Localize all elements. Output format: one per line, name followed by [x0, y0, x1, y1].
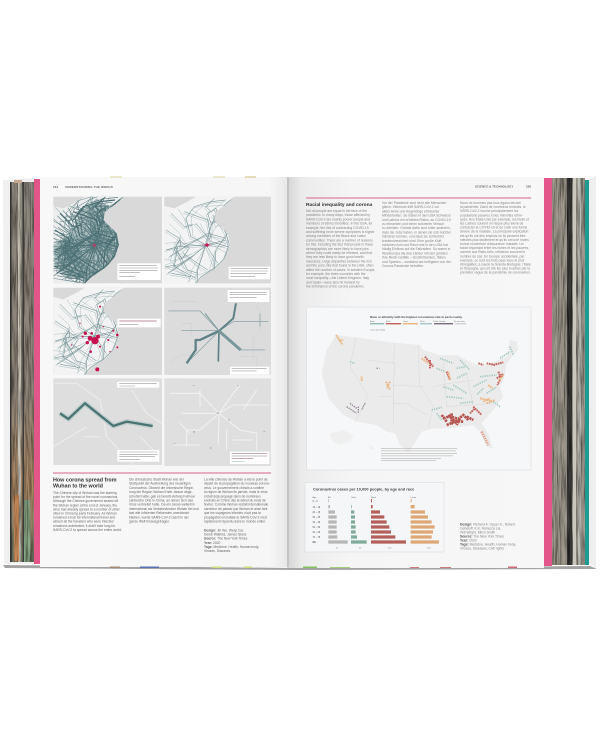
axis values: 160 — [427, 548, 431, 550]
right English text: insurance. Huge disparities between the rich — [306, 259, 372, 263]
county clusters asian and white — [350, 347, 513, 420]
faint lines — [170, 297, 260, 370]
map legend: Asian — [370, 320, 375, 323]
right English text: among members of the Black and Latino — [306, 234, 366, 238]
right French text: populations pauvres et les minorités ethni- — [460, 213, 523, 217]
right German text — [382, 201, 452, 268]
map legend: Cases per 10,000 — [370, 328, 385, 332]
right header: SCIENCE & TECHNOLOGY — [475, 184, 513, 188]
left heading: Wuhan to the world — [53, 484, 103, 490]
left credits — [204, 528, 259, 553]
left French text: s'était déjà propagé dans de nombreux — [204, 494, 261, 498]
left heading — [53, 477, 117, 490]
map title: Race or ethnicity with the highest coronavirus rate in each county — [370, 315, 462, 319]
left header: UNDERSTANDING THE WORLD — [65, 185, 114, 189]
right credits: Year: 2020 — [460, 538, 477, 542]
age labels: 70 – 79 — [312, 537, 321, 539]
right French text: nombre de cas. En Europe occidentale, par — [460, 254, 525, 258]
right French text — [460, 201, 531, 275]
left English text: point for the spread of the novel coronavirus. — [53, 495, 118, 499]
right English text: where they could easily be infected, and that — [306, 251, 372, 255]
right cover edge — [589, 175, 596, 569]
axis values: 51 — [336, 548, 339, 550]
map 3: infection dots — [53, 288, 162, 375]
map legend — [370, 320, 466, 332]
left German text: zahlreiche Orte in China, an denen sich das — [129, 498, 193, 502]
right French text: contracter la COVID-19 et de subir une forme — [460, 226, 527, 230]
right French text: d'inégalités, à savoir la Grande-Bretagne, l'Italie — [460, 262, 531, 266]
right German text: infizieren können, und dass sie schlechter — [382, 235, 445, 239]
left French text: la région de Wuhan fin janvier, mais le virus — [204, 490, 268, 494]
right English text: example, the risk of contracting COVID-19 — [306, 226, 369, 230]
right German text: allem Arme und Angehörige ethnischer — [382, 209, 440, 213]
right English text: demographics are more likely to have jobs — [306, 247, 369, 251]
county clusters black — [442, 413, 473, 425]
left French text: février. Comme Wuhan restait internationale — [204, 503, 268, 507]
age labels: 30 – 39 — [312, 517, 321, 519]
left credits: Tags: Medicine, Health, Human body, — [204, 545, 259, 549]
Wuhan marker — [93, 244, 96, 247]
age labels: 50 – 59 — [312, 527, 321, 529]
callouts — [117, 382, 159, 462]
teal edge — [585, 180, 589, 565]
US map panel — [306, 307, 531, 470]
age labels: 10 – 19 — [312, 507, 321, 509]
right German text: gleich. Vielerorts trifft SARS-CoV-2 vor — [382, 205, 440, 209]
right French text: première vague de la pandémie de coronavirus. — [460, 271, 531, 275]
age labels: 60 – 69 — [312, 532, 321, 534]
left German text: rung die Region Wuhan Ende Januar abge- — [129, 490, 193, 494]
map legend: Latino — [403, 320, 408, 323]
right German text: Westeuropa die drei Länder mit den größten — [382, 251, 448, 255]
right header — [475, 184, 531, 188]
Wuhan marker — [205, 243, 209, 247]
left English text — [53, 491, 122, 532]
right German text: zu erleiden. Gründe dafür sind unter anderem, — [382, 226, 451, 230]
infection clusters — [71, 306, 119, 371]
age labels: 20 – 29 — [312, 512, 321, 514]
left German text: Virus verbreitet hatte. Da ein Janan weiterhin — [129, 503, 195, 507]
column headers — [312, 496, 417, 499]
bar chart panel — [305, 482, 444, 552]
county clusters pacific and native — [347, 368, 379, 413]
bars: other — [351, 505, 367, 544]
map legend: Pacific Islander — [433, 320, 446, 323]
right French text: la pandémie. Dans de nombreux endroits, le — [460, 205, 526, 209]
US land — [322, 335, 518, 453]
right German text: Ihre Reich-Gefälle – Großbritannien, Italien — [382, 256, 446, 260]
column headers: All — [328, 496, 331, 499]
right German text: und Spanien – zunächst am heftigsten von der — [382, 260, 452, 264]
right German text: krankenversichert sind. Eine große Kluft — [382, 239, 441, 243]
left English text: Although the Chinese government sealed off — [53, 499, 118, 503]
right German text: Corona-Pandemie betroffen. — [382, 264, 424, 268]
axis values: 130 — [388, 548, 392, 550]
right English text: SARS-CoV-2 are mainly poorer people and — [306, 217, 370, 221]
right pink edge — [544, 178, 552, 566]
right French text: comme aux États-Unis, influence souvent le — [460, 249, 525, 254]
right German text: häufig Einfluss auf die Fallzahlen. So waren in — [382, 247, 451, 251]
column headers: Age — [312, 496, 317, 499]
left German text: Die chinesische Stadt Wuhan war der — [129, 478, 185, 482]
right French text: bonne couverture d'assurance maladie. Un — [460, 242, 524, 246]
map 4: schematic flow — [164, 288, 271, 375]
right French text: infectés plus facilement et qu'ils ont une moins — [460, 238, 529, 242]
right English text — [306, 209, 375, 289]
left French text: rapidement répandu dans le monde entier. — [204, 520, 266, 524]
bars: black — [371, 499, 406, 544]
right credits: Viruses, Diseases, Civil rights — [460, 546, 504, 550]
left page stack — [10, 180, 34, 562]
location markers — [173, 385, 265, 449]
map 6: light network — [164, 378, 271, 466]
Alaska and Hawaii — [330, 430, 375, 450]
callout — [229, 267, 270, 279]
left German text: blieben, wurde SARS-CoV-2 rasch in der — [129, 515, 190, 519]
map footnote — [381, 448, 457, 461]
right German text: Minderheiten. So haben in den USA Schwarze — [382, 214, 451, 218]
thin routes — [168, 311, 269, 363]
left English text: cities in China by early February. As Wuhan — [53, 512, 117, 516]
column headers: Black — [371, 497, 377, 499]
left English text: The Chinese city of Wuhan was the starting — [53, 491, 117, 495]
map legend: White — [420, 320, 425, 323]
left page block — [3, 177, 287, 567]
right English text: for example, the three countries with the — [306, 272, 366, 276]
age labels — [312, 501, 321, 544]
map 2: sparse network — [164, 196, 271, 284]
column headers: Latino — [410, 496, 417, 499]
right English text: pandemic. In many ways, those affected by — [306, 213, 370, 217]
right edge block — [544, 175, 596, 569]
chart title: Coronavirus cases per 10,000 people, by age and race — [313, 486, 415, 492]
left credits: Viruses, Diseases — [204, 549, 231, 553]
right French text: sévère de la maladie. La principale explication — [460, 230, 529, 234]
right English text: members of ethnic minorities. In the USA, for — [306, 222, 373, 226]
left credits: Source: The New York Times — [204, 537, 248, 541]
map legend: Black — [386, 321, 391, 323]
left credits: Derek Watkins, James Glanz — [204, 533, 247, 537]
left cover edge — [3, 178, 34, 564]
left German text: Startpunkt der Ausbreitung des neuartigen — [129, 482, 191, 486]
column headers: Other — [351, 496, 357, 499]
right credits: Source: The New York Times — [460, 534, 504, 538]
right header: 155 — [526, 184, 531, 188]
right English text: the imminence of the corona pandemic. — [306, 285, 365, 289]
left English text: SARS-CoV-2 to spread across the entire world. — [53, 528, 122, 532]
callouts — [228, 290, 269, 375]
right English text: affect the number of cases. In western Europe, — [306, 268, 375, 272]
right German text: Vor der Pandemie sind nicht alle Menschen — [382, 201, 446, 205]
right German text: zwischen Arm und Reich wie in den USA hat — [382, 243, 448, 247]
left French text: départ de la propagation du nouveau corona- — [204, 482, 270, 486]
left English text: remained a hub for international travel and — [53, 516, 115, 520]
right page stack — [552, 178, 585, 565]
left English text: almost all the travelers who were infected — [53, 520, 114, 524]
right French text: ques. Aux États-Unis par exemple, les Noirs et — [460, 216, 529, 221]
right English text: and suffering more severe symptoms is higher — [306, 230, 375, 234]
left German text — [129, 478, 199, 524]
right French text: SARS-CoV-2 touche principalement les — [460, 209, 519, 213]
left English text: the Wuhan region at the end of January, the — [53, 503, 117, 507]
right credits: Design: Richard A. Oppel Jr., Robert — [460, 522, 515, 526]
right English text: most inequality—the United Kingdom, Italy — [306, 276, 369, 280]
right English text: for this, including the fact that people in these — [306, 243, 373, 247]
county clusters latino — [336, 335, 503, 403]
right credits — [460, 522, 516, 550]
bars: latino — [411, 499, 439, 544]
callout — [117, 263, 161, 280]
right English text: communities. There are a number of reasons — [306, 238, 373, 242]
left page paper — [40, 177, 287, 567]
right credits: Gebeloff, K.K. Rebecca Lai, — [460, 526, 501, 530]
right English text: they are less likely to have good health — [306, 255, 364, 259]
right German text: zu erkranken und einen schweren Verlauf — [382, 222, 444, 226]
left German text: Coronavirus. Obwohl die chinesische Regie- — [129, 486, 194, 490]
right French text: et l'Espagne, qui ont été les plus touchés par la — [460, 267, 530, 271]
axis values — [336, 548, 431, 550]
bars: all — [328, 499, 348, 544]
page edge colour marks — [110, 176, 517, 568]
right French text: est qu'ils ont des emplois où ils peuvent être — [460, 234, 526, 238]
left French text — [204, 478, 270, 524]
axis values: 66 — [359, 548, 362, 550]
left German text: ganze Welt hinausgetragen. — [129, 520, 170, 524]
left French text: La ville chinoise de Wuhan a été le point de — [204, 478, 268, 482]
right French text: fossé important entre les riches et les pauvres, — [460, 246, 529, 250]
right English text: Not all people are equal in the face of the — [306, 209, 367, 213]
right English text: and Spain—were also hit hardest by — [306, 280, 360, 284]
gutter fold — [287, 177, 289, 567]
map 5: snake route — [53, 378, 162, 465]
left English text: virus had already spread to a number of other — [53, 507, 121, 511]
right German text: dass sie Jobs haben, in denen sie sich leichter — [382, 230, 452, 234]
map legend: No race data — [454, 320, 466, 323]
left German text: schottet hatte, gab es bereits Anfang Februar — [129, 494, 196, 498]
left heading: How corona spread from — [53, 477, 117, 483]
right French text: exemple, ce sont les trois pays avec le plus — [460, 258, 525, 262]
state borders — [350, 337, 493, 428]
left pink rule — [53, 472, 271, 474]
right credits: Tags: Medicine, Health, Human body, — [460, 542, 516, 546]
right pink rule — [306, 198, 531, 199]
age labels: 0 – 9 — [312, 501, 318, 503]
right credits: Will Wright, Mitch Smith — [460, 530, 495, 534]
left credits: Design: Jin Wu, Weiyi Cai, — [204, 528, 244, 532]
map grid top — [53, 196, 271, 375]
map grid bottom — [53, 378, 271, 466]
right French text: Nous ne sommes pas tous égaux devant — [460, 201, 521, 205]
left header: 154 — [53, 185, 58, 189]
right heading: Racial inequality and corona — [306, 202, 373, 208]
left French text: endroits en Chine dès le début du mois de — [204, 498, 266, 502]
left English text: remained undetected, it didn't take long for — [53, 524, 116, 528]
left French text: propagation mondiale le SARS-CoV-2 s'est — [204, 515, 267, 519]
map 1: dense network — [53, 196, 162, 284]
left credits: Year: 2020 — [204, 541, 220, 545]
age labels: 80+ — [312, 542, 317, 544]
right English text: and the poor, like that found in the USA, often — [306, 264, 374, 268]
thick routes — [187, 331, 219, 363]
left German text: international als Verkehrsknoten Wuhan fiel und — [129, 507, 199, 511]
callout — [230, 452, 269, 464]
right French text: les Latinos courent un risque plus élevé de — [460, 222, 524, 226]
book shadow — [3, 565, 597, 570]
age labels: 40 – 49 — [312, 522, 321, 524]
left pink edge — [34, 179, 40, 564]
left French text: virus. Le gouvernement chinois a confiné — [204, 486, 264, 490]
left French text: carrefour de passer par Wuhan et ainsi tant — [204, 507, 267, 511]
right German text: und Latinos ein erhöhtes Risiko, an COVID-19 — [382, 218, 451, 222]
left French text: que les voyageurs infectés n'ont pas la — [204, 511, 261, 515]
right page paper — [287, 177, 544, 568]
callout — [117, 319, 161, 327]
left German text: fast alle infizierten Reisenden unentdeckt — [129, 511, 189, 515]
